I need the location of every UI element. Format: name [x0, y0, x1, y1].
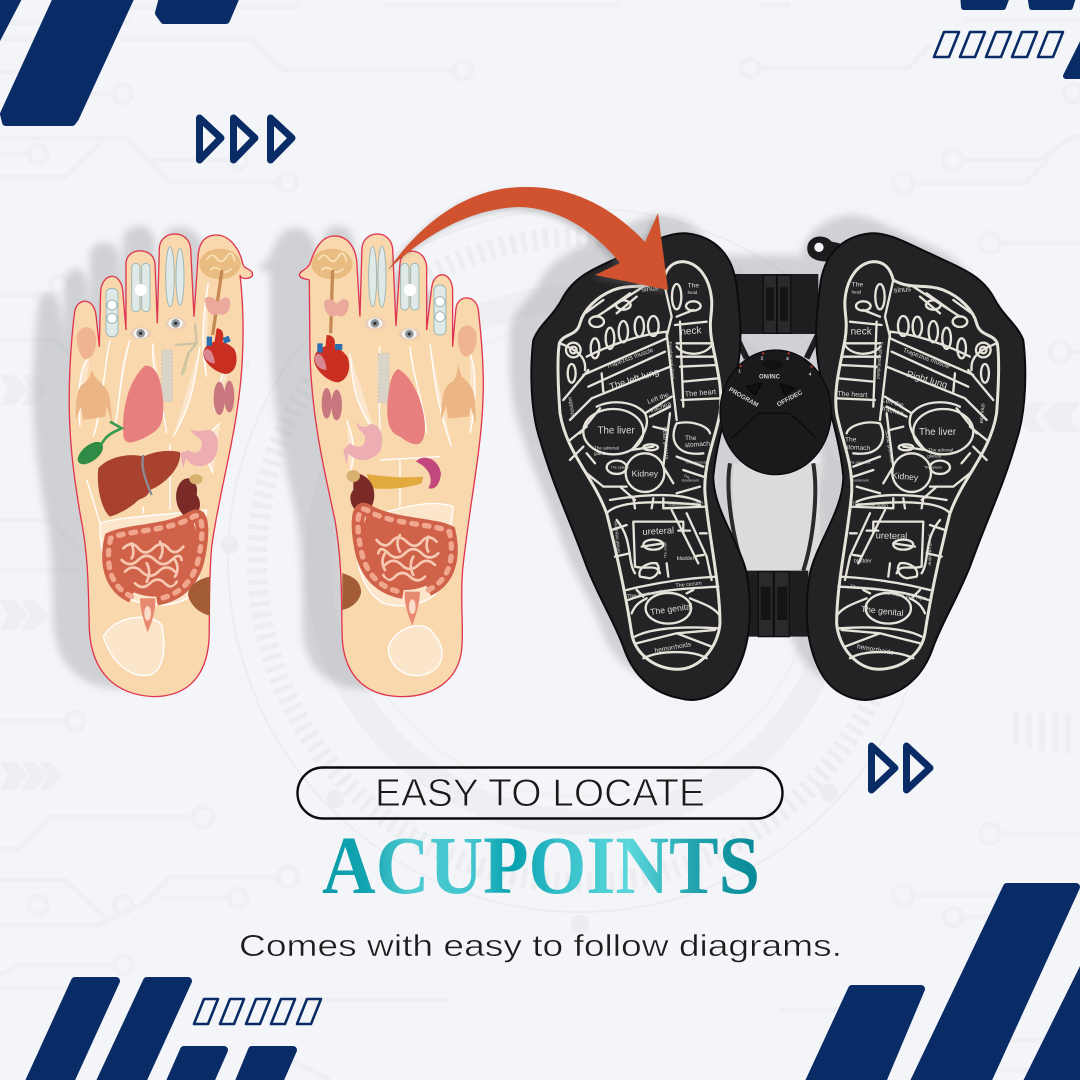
icon: lung [387, 369, 425, 444]
control unit: PROGRAM [727, 386, 759, 409]
right pad: The liver [919, 427, 957, 438]
icon: liver [98, 451, 180, 517]
right pad: Right lung [905, 369, 949, 390]
left pad [531, 233, 750, 700]
left pad: trachea [649, 400, 672, 415]
right pad: head [852, 289, 862, 294]
left pad: ureteral [642, 525, 674, 537]
left pad: The spleen [611, 465, 629, 469]
icon: kidney [347, 470, 374, 514]
left pad: Left the [647, 392, 670, 406]
right pad: Trapezius muscle [902, 347, 951, 371]
icon: torso [441, 365, 476, 423]
icon: bladder [342, 573, 361, 610]
control unit: 1 [738, 369, 741, 375]
right pad: Left the [881, 397, 905, 409]
left pad: The [685, 435, 697, 442]
navy bars: top right [963, 0, 1080, 76]
right pad: duodenum [852, 479, 869, 483]
right pad: The pancreas [848, 460, 871, 464]
left pad: neck [680, 325, 702, 338]
massage mat shadow [509, 215, 1003, 682]
navy bars: bottom right [808, 887, 1080, 1080]
icon: spleen [416, 458, 441, 489]
icon: lung [123, 366, 163, 442]
right pad: The spleen [924, 465, 942, 469]
right pad [807, 233, 1025, 700]
main heading: ACUPOINTS [322, 819, 760, 911]
left pad: glands [594, 451, 608, 456]
icon: torso [76, 370, 113, 423]
icon: stomach [180, 428, 218, 468]
right pad: ureteral [876, 530, 908, 541]
right pad: The [845, 437, 857, 444]
subheading: Comes with easy to follow diagrams. [239, 928, 842, 963]
left pad: The heart [684, 387, 716, 399]
outlined parallelograms: top right [934, 32, 1063, 57]
icon: small lungs [214, 381, 234, 415]
navy bars: top left [0, 0, 237, 122]
control unit: OFF/DEC [776, 389, 804, 408]
key ring tab [807, 237, 840, 262]
control unit: 4 [809, 371, 812, 377]
right pad: trachea [881, 405, 905, 418]
icon: stomach [343, 422, 382, 465]
icon: eyes [130, 317, 186, 339]
navy bars: bottom left [28, 981, 293, 1080]
background concentric rings [221, 208, 932, 933]
left pad: The genital [650, 601, 693, 617]
right pad: Esophageal gland [876, 342, 884, 380]
left pad: The waist and hips [627, 588, 672, 600]
foot shadows [33, 226, 444, 689]
right pad: The cecum [850, 584, 877, 593]
left pad: Transverse colon [667, 500, 704, 507]
right pad: hemorrhoids [856, 643, 895, 657]
right pad: The heart [837, 391, 867, 399]
icon: gallbladder [78, 422, 122, 464]
right pad: Small intestine [926, 533, 932, 566]
right pad: glands [927, 453, 942, 458]
left pad: The left lung [608, 367, 660, 392]
icon: brain [311, 249, 353, 333]
pill label: EASY TO LOCATE [375, 772, 705, 815]
icon: bladder [188, 577, 210, 616]
reflexology foot chart: right [299, 234, 483, 697]
right pad: Transverse colon [852, 501, 888, 508]
control unit: 2 [761, 355, 764, 361]
intestines [109, 516, 202, 632]
icon: ear [77, 327, 96, 359]
curved orange arrow [388, 187, 668, 290]
left pad: Esophageal gland [667, 341, 676, 379]
outlined parallelograms: bottom left [194, 999, 321, 1024]
right pad: The genital [860, 604, 904, 618]
icon: heart [203, 328, 237, 374]
left pad: The liver [598, 425, 635, 436]
right pad: sinus [893, 284, 912, 295]
centre gap [733, 463, 820, 573]
icon: ear [458, 325, 477, 357]
top hinge [733, 274, 818, 358]
left pad: The cecum [675, 581, 703, 589]
right pad: Kidney [891, 470, 919, 483]
icon: small lungs [322, 388, 342, 420]
right pad: shoulder [978, 403, 986, 424]
bones right [347, 343, 475, 676]
left pad: hemorrhoids [654, 641, 692, 655]
control unit [720, 350, 831, 475]
right pad: Solar plexus [883, 429, 895, 463]
toe bones [106, 247, 184, 337]
left pad: shoulder [567, 396, 577, 417]
left pad: The pancreas [685, 460, 708, 464]
pill label [298, 768, 782, 818]
left pad: bladder [677, 556, 695, 562]
triple play icons [200, 118, 292, 160]
left pad: The adrenal [594, 445, 619, 450]
double play icons [872, 746, 930, 790]
left pad: The small [664, 542, 668, 558]
icon: pancreas [367, 474, 423, 489]
control unit: 3 [786, 356, 789, 362]
icon: thyroid [205, 297, 230, 315]
left pad: The [683, 474, 690, 480]
right pad: stomach [845, 444, 871, 452]
right pad: neck [851, 326, 872, 337]
left pad: duodenum [682, 479, 699, 483]
icon: eyes [364, 317, 420, 340]
left pad: Kidney [632, 469, 659, 479]
left pad: The [688, 282, 699, 289]
frame rim [728, 463, 815, 571]
left pad: Solar plexus [660, 426, 669, 460]
control unit: ON/INC [759, 374, 781, 380]
icon: trachea [378, 353, 389, 403]
left pad: Trapezius muscle [606, 347, 655, 370]
icon: kidney [176, 474, 203, 518]
bones left [79, 283, 237, 676]
icon: trachea and bronchi [162, 323, 197, 402]
decorative chevrons and barcode [0, 375, 1080, 790]
left pad: Small intestine [613, 521, 622, 554]
right pad: The adrenal [928, 448, 953, 453]
right pad: The waist and hips [881, 590, 927, 602]
right pad: bladder [854, 559, 872, 565]
reflexology foot chart: left [69, 234, 253, 697]
right pad: The [852, 282, 863, 289]
bottom hinge [745, 571, 808, 637]
left pad: head [688, 290, 698, 295]
left pad: sinus [641, 283, 659, 294]
intestines [358, 509, 451, 626]
icon: heart [314, 335, 349, 382]
icon: brain [199, 249, 241, 335]
toe bones [369, 246, 446, 335]
massage mat product [531, 233, 1025, 700]
left pad: stomach [685, 441, 711, 449]
arrow shadow [385, 190, 665, 293]
icon: thyroid [324, 299, 349, 316]
